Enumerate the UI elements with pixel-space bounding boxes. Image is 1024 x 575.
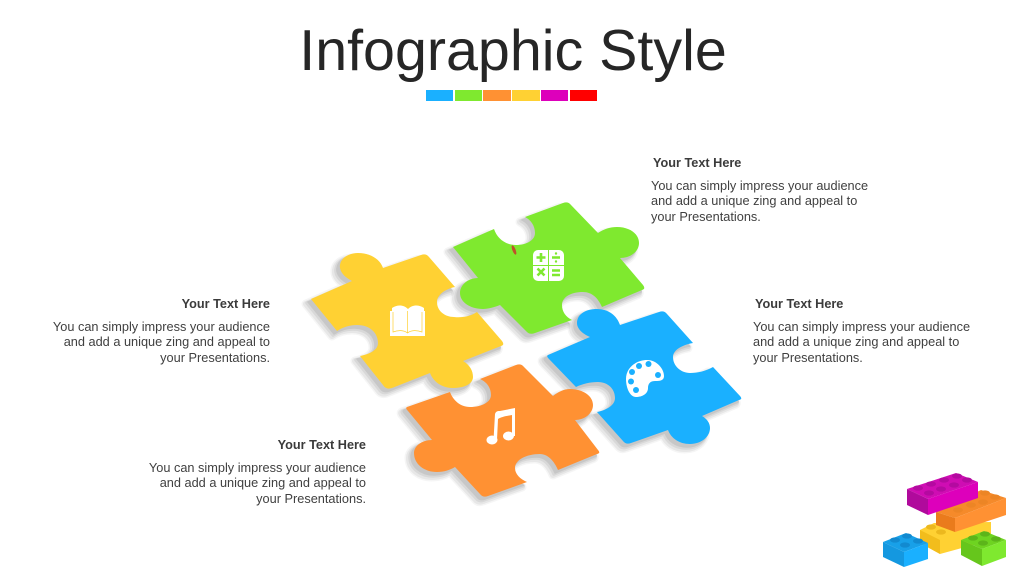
text block: top right: You can simply impress your audience <box>651 178 868 193</box>
puzzle piece shadows <box>306 205 738 502</box>
brick: green <box>961 531 1006 566</box>
brick: yellow <box>920 522 991 554</box>
text block: bottom left <box>149 438 366 506</box>
title: Infographic Style <box>299 19 727 83</box>
puzzle: green piece <box>453 202 644 334</box>
text block: middle right: and add a unique zing and appeal to <box>753 334 959 349</box>
text block: top right: your Presentations. <box>651 209 761 224</box>
text block: top right <box>651 156 868 224</box>
text block: bottom left: Your Text Here <box>278 438 366 452</box>
puzzle: yellow piece <box>311 253 503 389</box>
icon: book <box>390 305 425 336</box>
text block: middle right <box>753 297 970 365</box>
text block: middle left: Your Text Here <box>182 297 270 311</box>
text block: middle left: You can simply impress your audience <box>53 319 270 334</box>
text block: middle right: your Presentations. <box>753 350 863 365</box>
text block: middle left: and add a unique zing and appeal to <box>64 334 270 349</box>
text block: middle right: You can simply impress your audience <box>753 319 970 334</box>
icon: calculator <box>533 250 564 281</box>
brick: blue <box>883 533 928 567</box>
puzzle: orange piece <box>406 364 599 497</box>
text block: top right: and add a unique zing and appeal to <box>651 193 857 208</box>
text block: bottom left: your Presentations. <box>256 491 366 506</box>
text block: bottom left: and add a unique zing and appeal to <box>160 475 366 490</box>
text block: bottom left: You can simply impress your audience <box>149 460 366 475</box>
colour bar <box>426 90 597 101</box>
mark on green piece <box>511 245 517 255</box>
text block: middle left <box>53 297 270 365</box>
text block: top right: Your Text Here <box>653 156 741 170</box>
text block: middle right: Your Text Here <box>755 297 843 311</box>
brick: orange <box>936 490 1006 532</box>
icon: music note <box>486 408 515 444</box>
puzzle: blue piece <box>547 309 741 444</box>
icon: palette <box>626 360 664 397</box>
text block: middle left: your Presentations. <box>160 350 270 365</box>
lego bricks <box>883 473 1006 567</box>
brick: magenta <box>907 473 978 515</box>
